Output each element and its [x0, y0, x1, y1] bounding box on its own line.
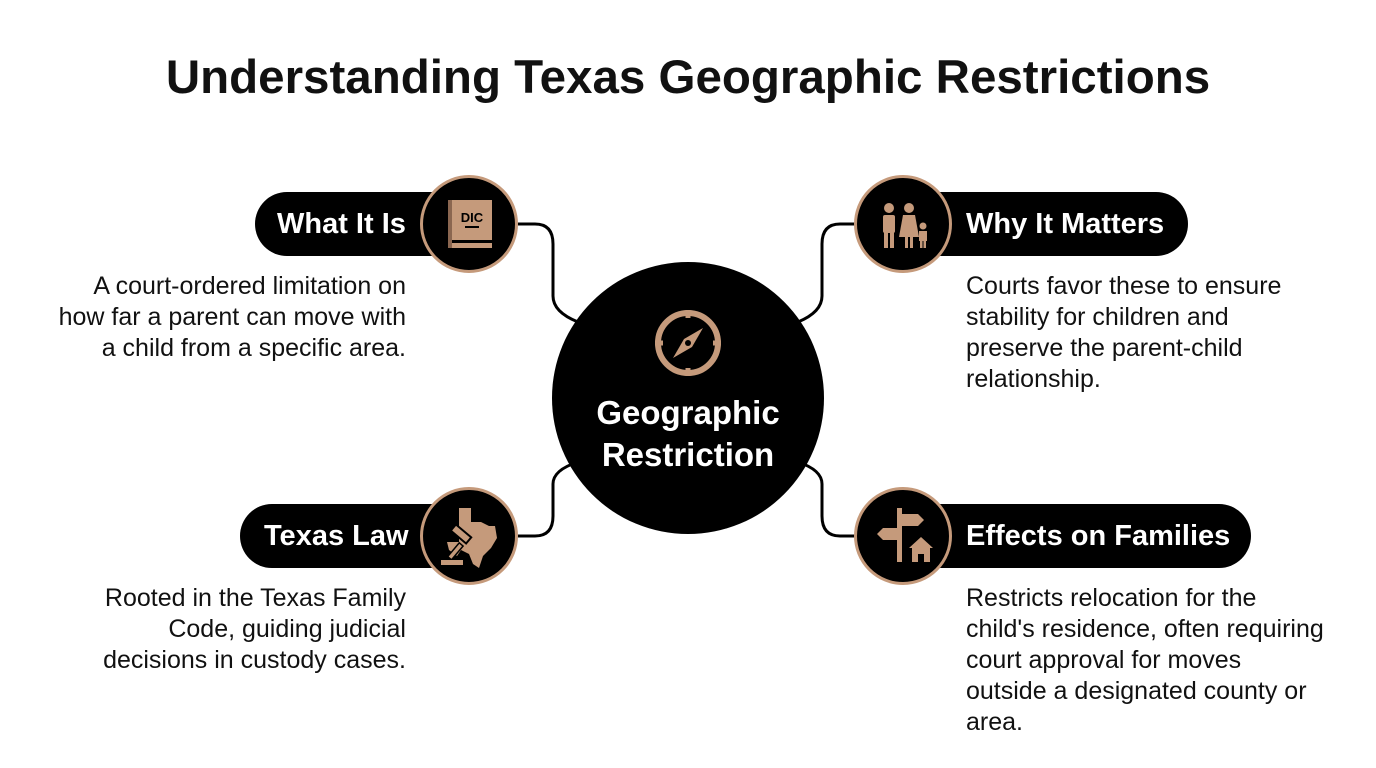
text: why it matters: relationship.: [966, 365, 1101, 393]
text: texas law: Rooted in the Texas Family: [105, 584, 406, 612]
pill heading: Why It Matters: [966, 208, 1164, 240]
text: effects: outside a designated county or: [966, 677, 1307, 705]
pill heading: [902, 192, 1188, 256]
text: texas law: [103, 584, 406, 674]
text: what it is: a child from a specific area.: [102, 334, 406, 362]
pill heading: [255, 192, 495, 256]
pill heading: What It Is: [277, 208, 406, 240]
text: effects: area.: [966, 708, 1023, 736]
text: effects: court approval for moves: [966, 646, 1241, 674]
panel: effects on families: [854, 487, 1251, 585]
center circle: [552, 262, 824, 534]
center label: [596, 394, 780, 473]
text: effects: Restricts relocation for the: [966, 584, 1256, 612]
text: what it is: A court-ordered limitation on: [93, 272, 406, 300]
panel: what it is: [255, 175, 518, 273]
pill heading: Effects on Families: [966, 520, 1230, 552]
text: effects: child's residence, often requiring: [966, 615, 1324, 643]
icon: texas gavel: [420, 487, 518, 585]
icon: compass: [655, 310, 721, 376]
panel: why it matters: [854, 175, 1188, 273]
text: why it matters: preserve the parent-child: [966, 334, 1243, 362]
icon: book: [420, 175, 518, 273]
icon: family: [854, 175, 952, 273]
center label: Geographic: [596, 394, 780, 431]
icon: signpost house: [854, 487, 952, 585]
pill heading: [240, 504, 490, 568]
icon: book: DIC: [461, 210, 484, 225]
text: what it is: [59, 272, 406, 362]
text: texas law: Code, guiding judicial: [168, 615, 406, 643]
text: what it is: how far a parent can move with: [59, 303, 406, 331]
pill heading: Texas Law: [264, 520, 409, 552]
text: why it matters: [966, 272, 1281, 393]
text: why it matters: Courts favor these to ensure: [966, 272, 1281, 300]
text: why it matters: stability for children and: [966, 303, 1229, 331]
text: effects: [966, 584, 1324, 736]
title: Understanding Texas Geographic Restrictions: [166, 51, 1210, 104]
text: texas law: decisions in custody cases.: [103, 646, 406, 674]
center label: Restriction: [602, 436, 774, 473]
pill heading: [902, 504, 1251, 568]
panel: texas law: [240, 487, 518, 585]
